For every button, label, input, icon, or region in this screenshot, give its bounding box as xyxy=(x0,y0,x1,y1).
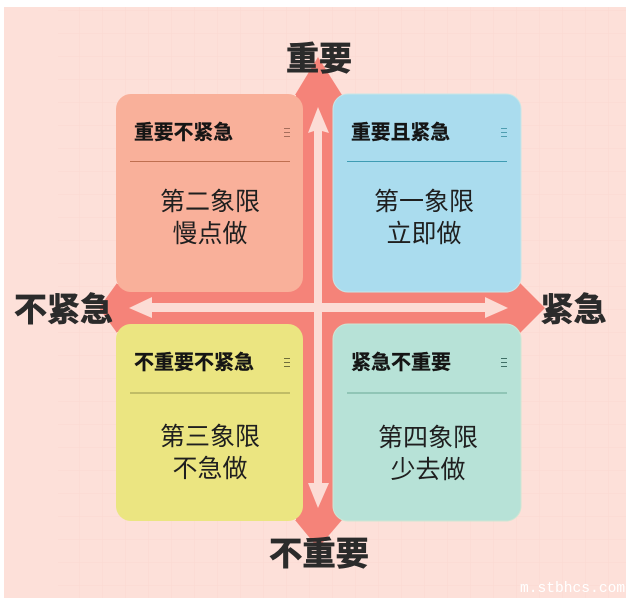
axis label: left: 不紧急 xyxy=(14,291,113,328)
quadrant text: 第二象限 xyxy=(160,188,260,216)
quadrant text: 第四象限 xyxy=(378,424,478,452)
axis label: bottom: 不重要 xyxy=(269,535,369,572)
menu icon xyxy=(284,128,290,136)
quadrant text: 少去做 xyxy=(390,456,466,484)
axis label: right: 紧急 xyxy=(540,291,606,328)
quadrant text: 第三象限 xyxy=(160,423,260,451)
red cross arrows xyxy=(99,57,545,548)
panel: urgent not important xyxy=(333,324,521,521)
axis label: top: 重要 xyxy=(286,40,352,77)
quadrant text: 不急做 xyxy=(172,455,248,483)
heading: 重要且紧急 xyxy=(351,121,450,144)
panel: not important not urgent xyxy=(116,324,303,521)
menu icon xyxy=(501,358,507,366)
vertical white arrow xyxy=(308,107,329,508)
panel: important and urgent xyxy=(333,94,521,292)
horizontal white arrow xyxy=(129,297,508,318)
quadrant text: 第一象限 xyxy=(374,188,474,216)
watermark: m.stbhcs.com xyxy=(520,581,625,597)
quadrant text: 慢点做 xyxy=(172,220,248,248)
heading: 紧急不重要 xyxy=(351,351,451,374)
quadrant text: 立即做 xyxy=(386,220,462,248)
heading: 不重要不紧急 xyxy=(134,351,254,374)
heading: 重要不紧急 xyxy=(134,121,233,144)
panel: important not urgent xyxy=(116,94,303,292)
menu icon xyxy=(284,358,290,366)
menu icon xyxy=(501,128,507,136)
